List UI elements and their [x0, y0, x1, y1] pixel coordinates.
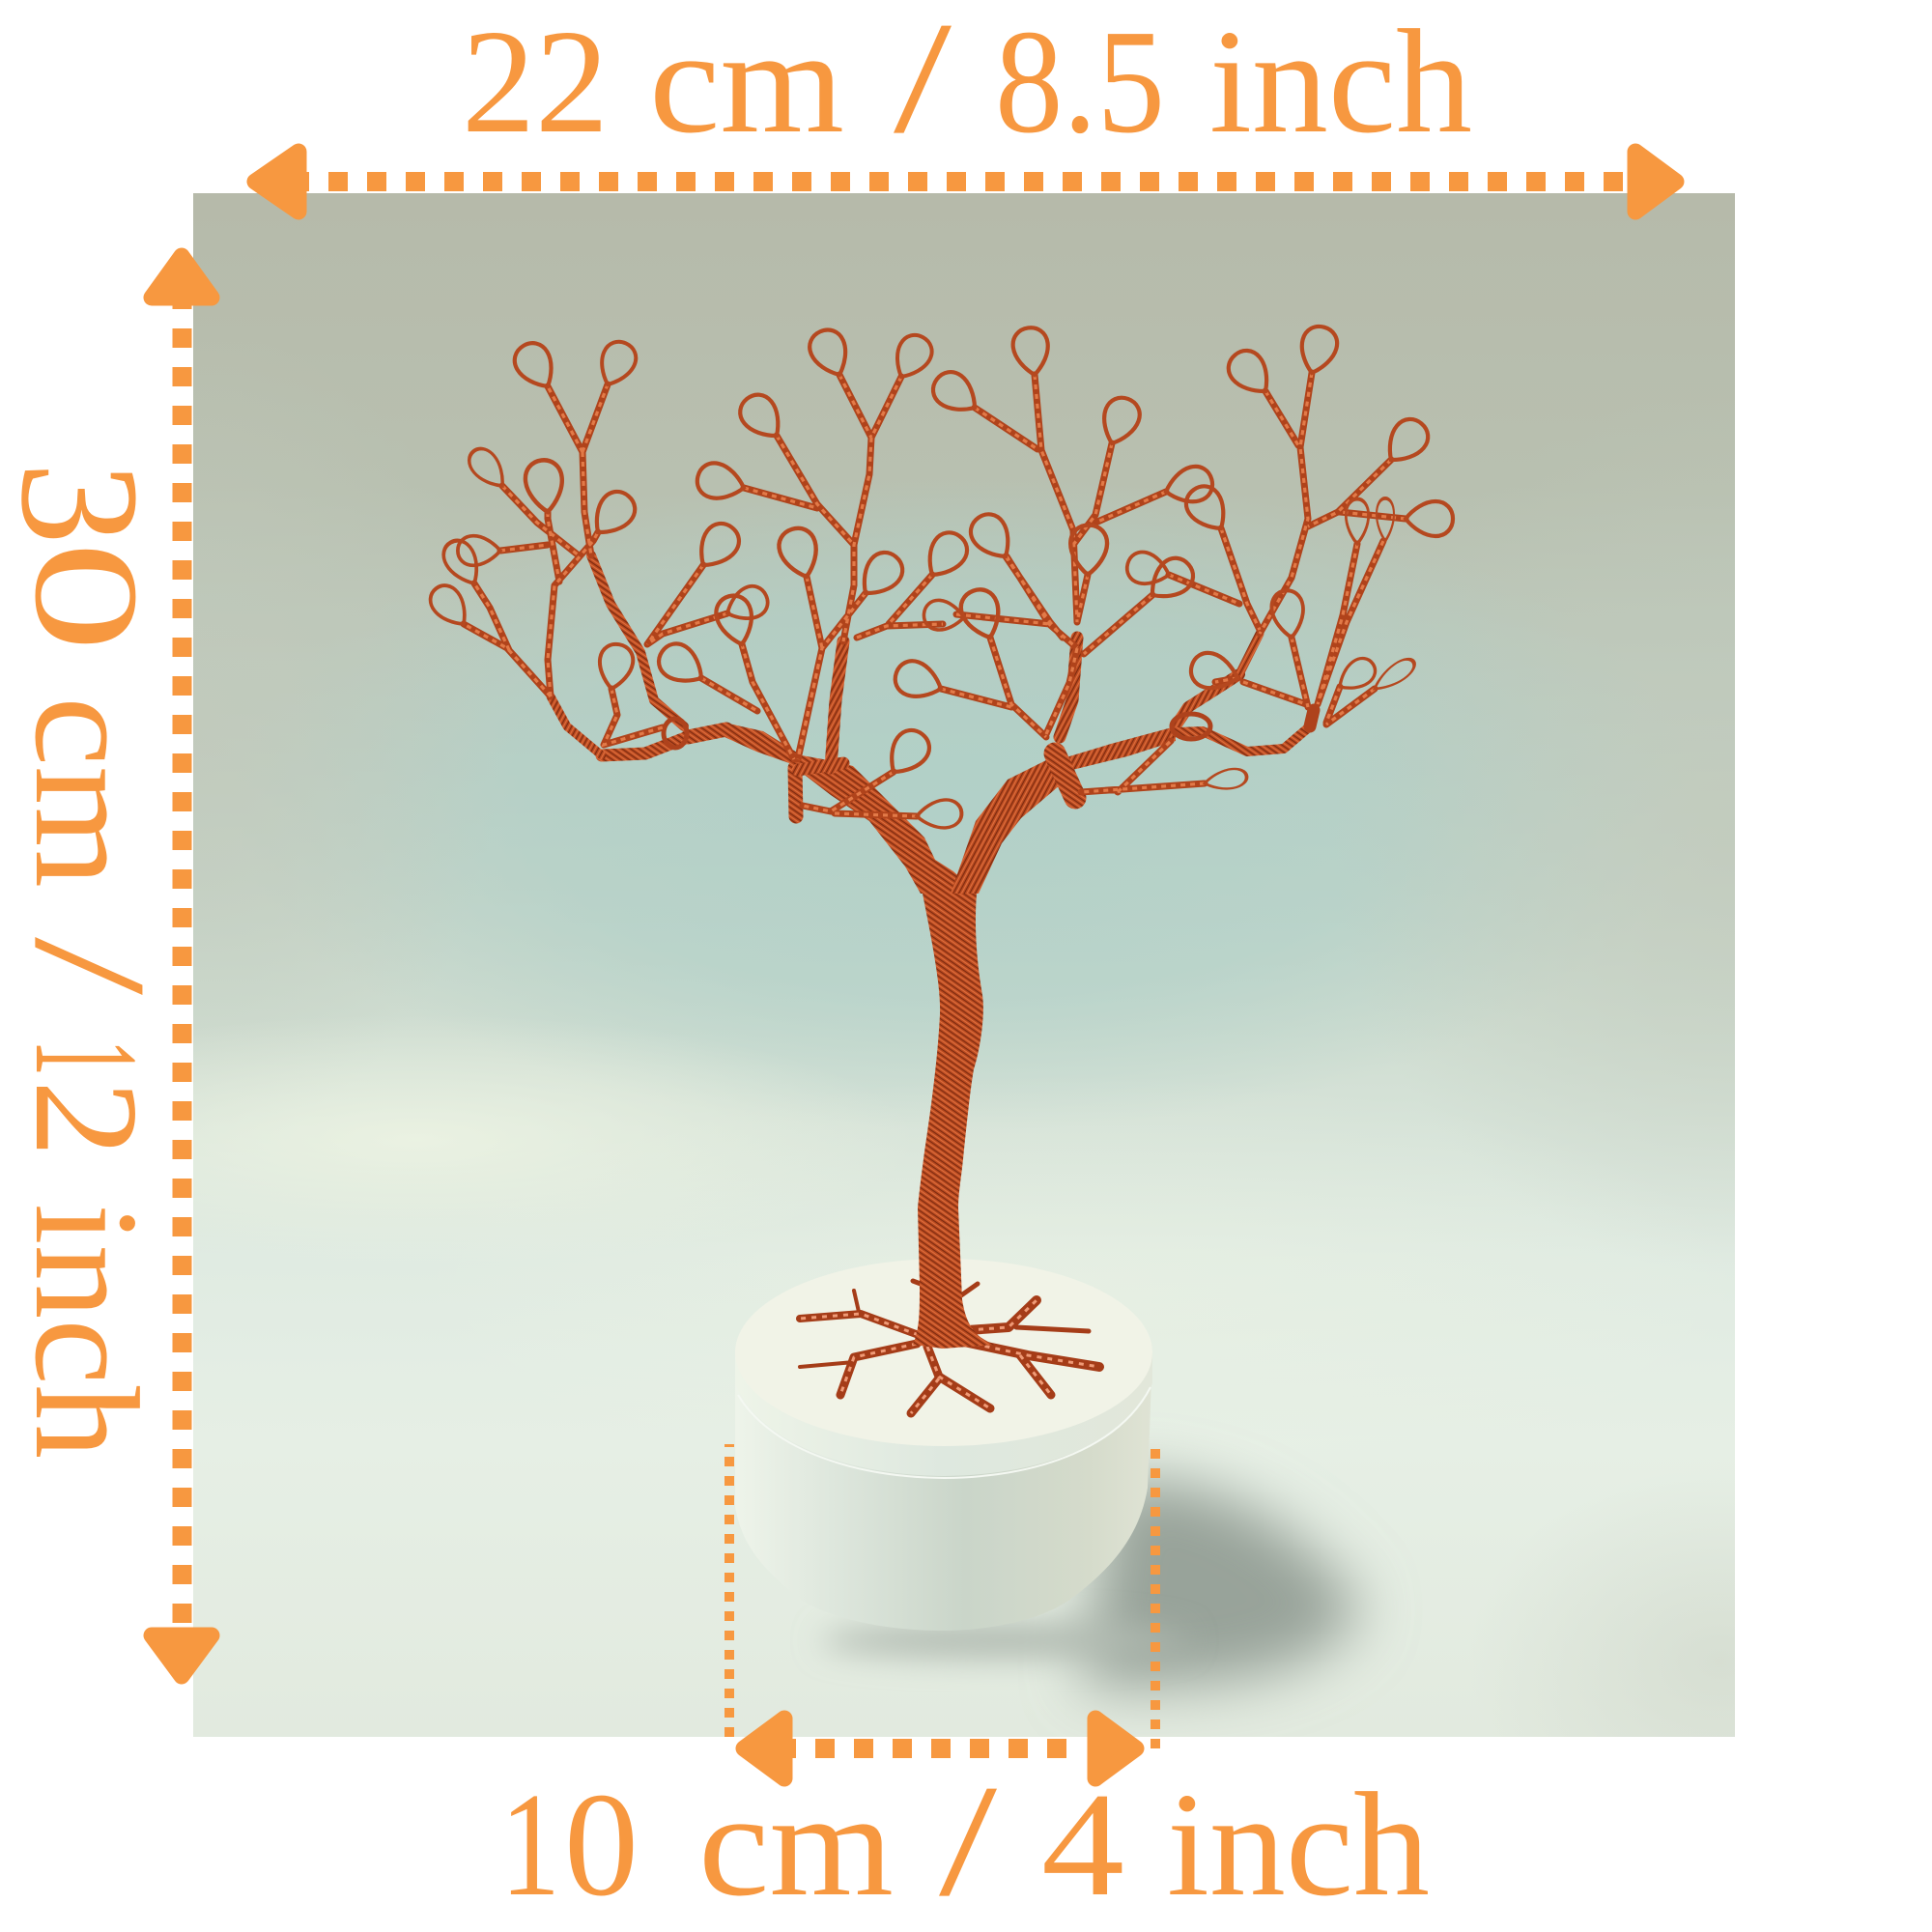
heading: height label: 0: [4, 541, 168, 652]
heading: pot width label: 4: [1041, 1763, 1124, 1927]
heading: height label: /: [2, 937, 180, 996]
right limb: [951, 634, 1310, 894]
heading: pot width label: [500, 1751, 1430, 1929]
heading: height label: inch: [4, 1204, 168, 1459]
tree trunk: [913, 884, 995, 1349]
left limb: [551, 555, 978, 894]
pot lid top: [735, 1259, 1152, 1446]
heading: height label: 2: [4, 1080, 168, 1157]
heading: pot width label: 0: [564, 1763, 639, 1927]
pot width dimension arrow: 10 cm: [744, 1719, 1136, 1778]
heading: pot width label: cm: [698, 1763, 894, 1927]
pot body: [735, 1377, 1151, 1631]
heading: width label: 8.5: [995, 0, 1165, 164]
pot width guide lines: [729, 1444, 1155, 1749]
heading: pot width label: inch: [1167, 1763, 1430, 1927]
photo panel background: [193, 193, 1735, 1737]
heading: height label: 1: [4, 1039, 168, 1076]
tree roots: [800, 1281, 1099, 1413]
height dimension arrow: 30 cm: [152, 256, 212, 1676]
heading: height label: [0, 462, 180, 1459]
heading: width label: inch: [1209, 0, 1472, 164]
white pot: [735, 1259, 1152, 1631]
heading: width label: 22: [462, 0, 609, 164]
pot shadow: [821, 1478, 1362, 1687]
wire wraps: [664, 710, 1314, 816]
heading: height label: cm: [4, 696, 168, 888]
heading: pot width label: /: [939, 1751, 998, 1929]
wire loops: [424, 323, 1453, 830]
heading: width label: cm: [649, 0, 844, 164]
main thick limbs: [551, 555, 1314, 894]
heading: pot width label: 1: [500, 1763, 560, 1927]
tree twigs: [464, 373, 1406, 816]
pot lid rim: [735, 1352, 1152, 1476]
width dimension arrow: 22 cm: [255, 152, 1676, 212]
heading: width label: [462, 0, 1472, 166]
